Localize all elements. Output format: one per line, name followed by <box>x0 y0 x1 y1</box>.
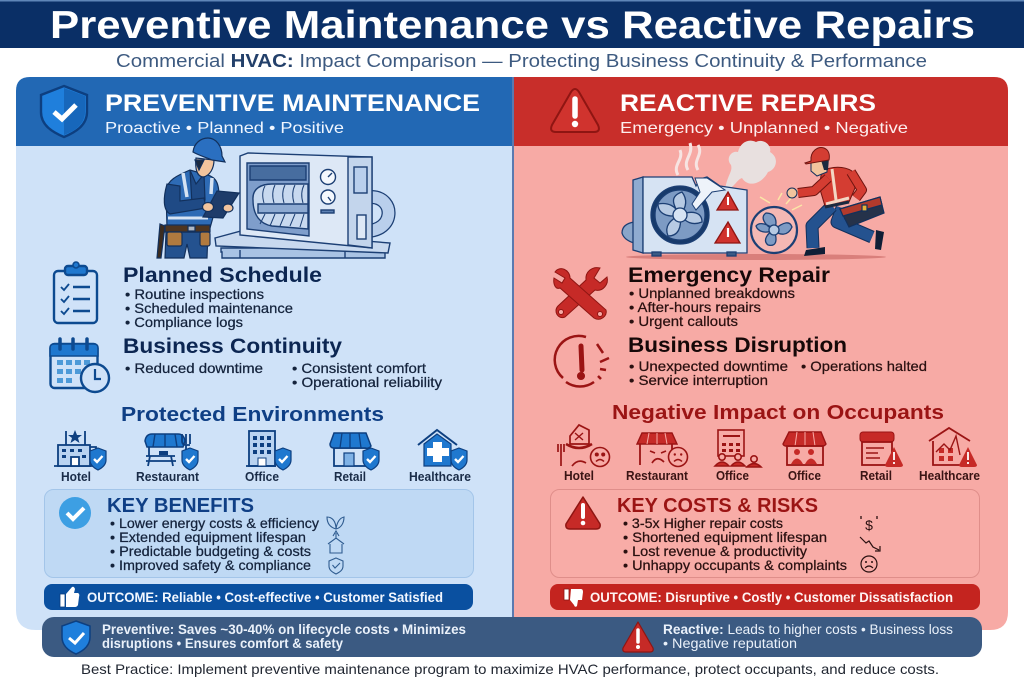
list: • Scheduled maintenance <box>125 300 293 316</box>
list: • Compliance logs <box>125 314 243 330</box>
list: • Lost revenue & productivity <box>623 543 807 559</box>
icon: warning triangle <box>623 622 653 652</box>
outcome text: OUTCOME: Reliable • Cost-effective • Customer Satisfied <box>87 590 443 605</box>
back leg <box>837 208 872 237</box>
heat waves <box>676 143 700 175</box>
front arm with fist <box>798 178 828 193</box>
torso <box>819 167 855 206</box>
list <box>125 286 293 330</box>
heading: Negative Impact on Occupants <box>612 402 944 424</box>
heading: Business Continuity <box>123 335 342 358</box>
list: • Lower energy costs & efficiency <box>110 515 319 531</box>
icon: warning triangle <box>551 89 599 132</box>
callout: key costs and risks <box>550 490 980 578</box>
icon: thumbs up <box>60 587 79 607</box>
item: business disruption <box>555 334 927 388</box>
panel heading: REACTIVE REPAIRS <box>620 90 876 117</box>
list <box>110 515 319 573</box>
heading: Business Disruption <box>628 334 847 357</box>
icon: money, decline, sad face <box>860 516 880 572</box>
icon: office <box>246 431 291 470</box>
label: Hotel <box>564 469 594 483</box>
icon: hotel <box>54 430 106 470</box>
summary: preventive: Preventive: Saves ~30-40% on lifecycle costs • Minimizes <box>102 622 466 637</box>
icon: restaurant <box>637 433 688 466</box>
icon: clipboard checklist <box>54 262 97 323</box>
label: Healthcare <box>409 470 471 484</box>
list <box>629 358 927 388</box>
panel heading: PREVENTIVE MAINTENANCE <box>105 90 480 117</box>
icon: shield check <box>41 86 87 137</box>
summary bar <box>42 617 982 657</box>
label: Retail <box>334 470 366 484</box>
icon: thumbs down <box>564 589 583 607</box>
item: emergency repair <box>554 264 830 329</box>
list: • Unhappy occupants & complaints <box>623 557 847 573</box>
callout: key benefits <box>44 490 474 578</box>
summary: reactive: • Negative reputation <box>663 636 797 651</box>
list: • 3-5x Higher repair costs <box>623 515 783 531</box>
list: • Unplanned breakdowns <box>629 285 795 301</box>
icon: crossed wrenches <box>554 268 607 319</box>
heading: KEY COSTS & RISKS <box>617 495 818 517</box>
label: Office <box>788 469 821 483</box>
legs <box>165 232 208 258</box>
icon: healthcare <box>418 430 467 470</box>
icon: office storefront <box>783 432 826 465</box>
technician running <box>787 148 884 256</box>
label: Restaurant <box>626 469 689 483</box>
panel tagline: Proactive • Planned • Positive <box>105 120 344 137</box>
label: Office <box>716 469 749 483</box>
tablet <box>203 191 239 218</box>
panel: preventive maintenance <box>16 77 512 630</box>
list: • Service interruption <box>629 372 768 388</box>
list <box>623 515 847 573</box>
icon: hotel <box>558 425 610 466</box>
panel header: reactive <box>514 77 1008 146</box>
summary: preventive: disruptions • Ensures comfort & safety <box>102 636 343 651</box>
summary: reactive <box>663 622 953 651</box>
front leg <box>812 206 832 248</box>
list: • Urgent callouts <box>629 313 738 329</box>
list: • Improved safety & compliance <box>110 557 311 573</box>
toolbox <box>840 197 884 227</box>
hands <box>202 202 214 212</box>
list: • Operations halted <box>801 358 927 374</box>
icon: leaf, lifespan, shield <box>327 517 344 574</box>
list: • Consistent comfort <box>292 360 426 376</box>
detached fan <box>751 207 797 253</box>
smoke <box>725 141 776 190</box>
list <box>629 285 795 329</box>
icon: warning triangle <box>566 497 600 529</box>
list: • Extended equipment lifespan <box>110 529 306 545</box>
ground shadow <box>626 254 886 260</box>
AC unit <box>622 177 747 256</box>
neck and face <box>196 158 214 177</box>
item: planned schedule <box>54 262 322 330</box>
icon: retail <box>330 433 379 470</box>
icon: check circle <box>59 497 91 529</box>
icon: healthcare warning <box>929 428 977 467</box>
icon: calendar with clock <box>50 339 109 392</box>
label: Hotel <box>61 470 91 484</box>
head <box>811 160 827 176</box>
sparks <box>760 190 802 210</box>
list: • Reduced downtime <box>125 360 263 376</box>
label: Restaurant <box>136 470 200 484</box>
list <box>125 360 442 390</box>
icon: office with people <box>715 430 761 467</box>
outcome bar: preventive <box>44 584 473 610</box>
heading: Planned Schedule <box>123 264 322 287</box>
HVAC unit on stand <box>215 153 390 258</box>
title banner: Preventive Maintenance vs Reactive Repairs <box>50 4 975 47</box>
illustration: technician inspecting HVAC unit <box>157 138 390 258</box>
panel header: preventive <box>16 77 512 146</box>
torso <box>166 170 219 228</box>
heading: KEY BENEFITS <box>107 495 254 517</box>
illustration: broken AC unit and running technician <box>622 141 886 260</box>
list: • Predictable budgeting & costs <box>110 543 311 559</box>
centre divider <box>512 77 514 630</box>
list: • Shortened equipment lifespan <box>623 529 827 545</box>
label: Healthcare <box>919 469 980 483</box>
list: • Unexpected downtime <box>629 358 788 374</box>
subtitle: Commercial HVAC: Impact Comparison — Protecting Business Continuity & Performance <box>116 51 927 71</box>
icon: broken-circle alert <box>555 336 609 387</box>
belt and pouches <box>165 225 210 232</box>
arm <box>164 184 206 214</box>
icon: money, decline, sad face: $ <box>865 517 873 533</box>
list: • Operational reliability <box>292 374 442 390</box>
outcome text: OUTCOME: Disruptive • Costly • Customer Dissatisfaction <box>590 590 953 605</box>
technician <box>157 138 239 258</box>
summary: reactive: Reactive: Leads to higher costs • Business loss <box>663 622 953 637</box>
helmet <box>193 138 225 162</box>
list: • Routine inspections <box>125 286 264 302</box>
section: protected environments <box>54 404 471 484</box>
panel: reactive repairs <box>512 77 1008 630</box>
best practice footer: Best Practice: Implement preventive maintenance program to maximize HVAC performance, protect occupants, and reduce costs. <box>81 661 939 677</box>
list: • After-hours repairs <box>629 299 761 315</box>
icon: restaurant <box>145 434 198 470</box>
label: Office <box>245 470 279 484</box>
item: business continuity <box>50 335 442 392</box>
outcome bar: reactive <box>550 584 980 610</box>
section: negative impact on occupants <box>558 402 980 483</box>
summary: preventive <box>102 622 466 651</box>
back arm <box>851 172 862 198</box>
icon: shield check <box>62 621 90 654</box>
icon: retail warning <box>860 432 903 467</box>
heading: Protected Environments <box>121 404 384 426</box>
panel tagline: Emergency • Unplanned • Negative <box>620 120 908 137</box>
helmet <box>805 148 829 164</box>
heading: Emergency Repair <box>628 264 830 287</box>
label: Retail <box>860 469 892 483</box>
